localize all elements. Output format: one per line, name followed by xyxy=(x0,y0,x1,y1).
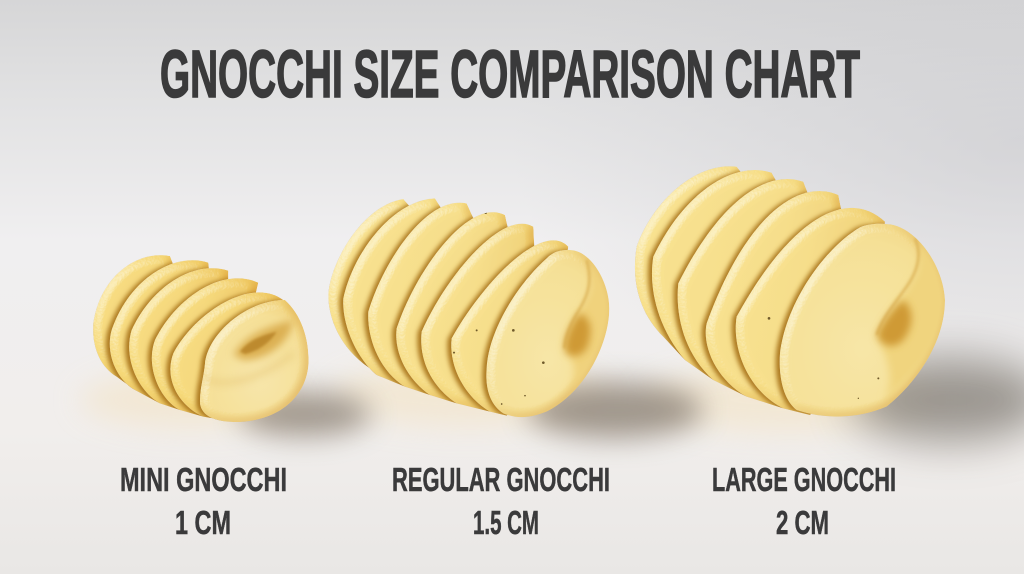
cast shadows xyxy=(80,358,1024,442)
end face and hole xyxy=(877,240,944,400)
label: mini gnocchi: 1 CM xyxy=(175,504,231,541)
label: regular gnocchi: 1.5 CM xyxy=(473,504,539,541)
label: mini gnocchi: MINI GNOCCHI xyxy=(120,461,287,498)
gnocchi: regular xyxy=(328,198,609,417)
label: mini gnocchi xyxy=(120,461,287,541)
gnocchi: large xyxy=(635,166,945,417)
specks xyxy=(453,211,545,405)
label: regular gnocchi: REGULAR GNOCCHI xyxy=(392,461,610,498)
label: large gnocchi xyxy=(712,461,896,541)
specks xyxy=(768,317,879,399)
gnocchi: mini xyxy=(93,255,309,422)
fold and hole xyxy=(203,353,293,382)
label: regular gnocchi xyxy=(392,461,610,541)
label: large gnocchi: 2 CM xyxy=(776,504,829,541)
label: large gnocchi: LARGE GNOCCHI xyxy=(712,461,896,498)
end face and hole xyxy=(565,260,610,382)
